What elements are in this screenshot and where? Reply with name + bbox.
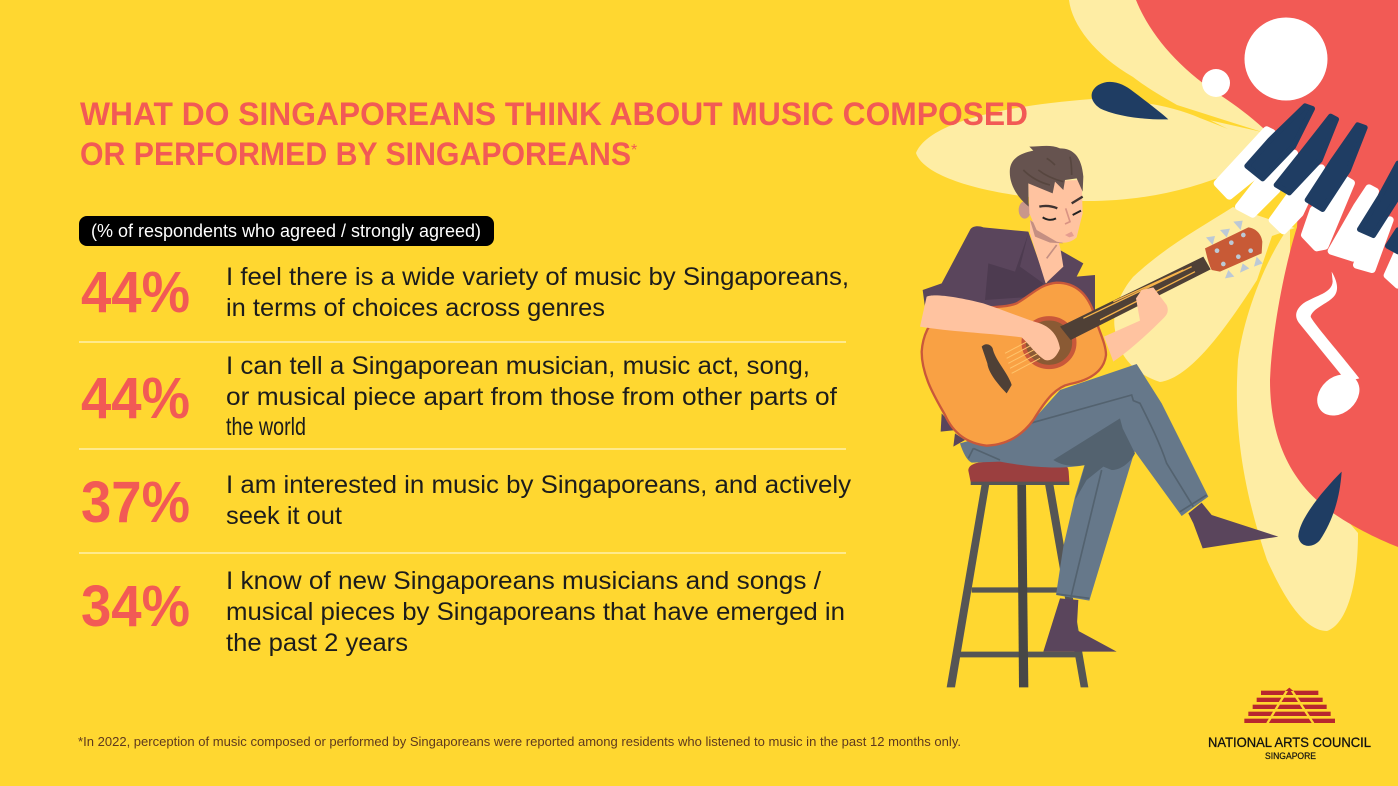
arms and hands [920,287,1168,362]
decoration: white circles [1202,18,1328,100]
neck and head [1010,146,1083,283]
icon: music note [1296,272,1368,424]
row 4: 34% [81,574,190,639]
title: * [631,142,637,159]
icon: piano keys [1217,106,1398,285]
row 4: musical pieces by Singaporeans that have emerged in [226,598,845,626]
row 2: the world [226,413,306,441]
illustration: background shapes [916,0,1398,631]
cream plumes [916,0,1358,631]
guitar [922,283,1106,446]
row 2: or musical piece apart from those from other parts of [226,383,837,411]
title: OR PERFORMED BY SINGAPOREANS [80,136,631,172]
footnote: *In 2022, perception of music composed or performed by Singaporeans were reported among residents who listened to music in the past 12 months only. [78,735,961,749]
title: WHAT DO SINGAPOREANS THINK ABOUT MUSIC COMPOSED [80,96,1028,132]
row 1 [81,260,849,325]
row 1: 44% [81,260,190,325]
legs [960,364,1278,652]
logo: National Arts Council [1208,687,1371,761]
icon: navy drop bottom [1298,472,1342,546]
logo: National Arts Council: NATIONAL ARTS COUNCIL [1208,734,1371,750]
title [80,96,1028,172]
guitar neck and headstock [1060,221,1263,340]
row 1: I feel there is a wide variety of music by Singaporeans, [226,263,849,291]
subtitle pill: (% of respondents who agreed / strongly agreed) [91,221,481,241]
row 2: 44% [81,366,190,431]
row 2 [81,352,837,441]
row 3 [81,470,852,535]
row 4: I know of new Singaporeans musicians and songs / [226,567,821,595]
row 4 [81,567,845,657]
subtitle pill [79,216,494,246]
shirt [923,226,1095,447]
row 3: 37% [81,470,190,535]
row 3: I am interested in music by Singaporeans, and actively [226,471,852,499]
row 4: the past 2 years [226,629,408,657]
row 1: in terms of choices across genres [226,294,605,322]
row 3: seek it out [226,502,342,530]
row 2: I can tell a Singaporean musician, music act, song, [226,352,810,380]
illustration: guitarist on stool [920,146,1278,687]
red blob [1136,0,1398,547]
yellow sliver [1183,107,1228,129]
stool [947,461,1088,687]
logo: National Arts Council: SINGAPORE [1265,751,1316,761]
icon: navy drop top [1092,82,1168,119]
